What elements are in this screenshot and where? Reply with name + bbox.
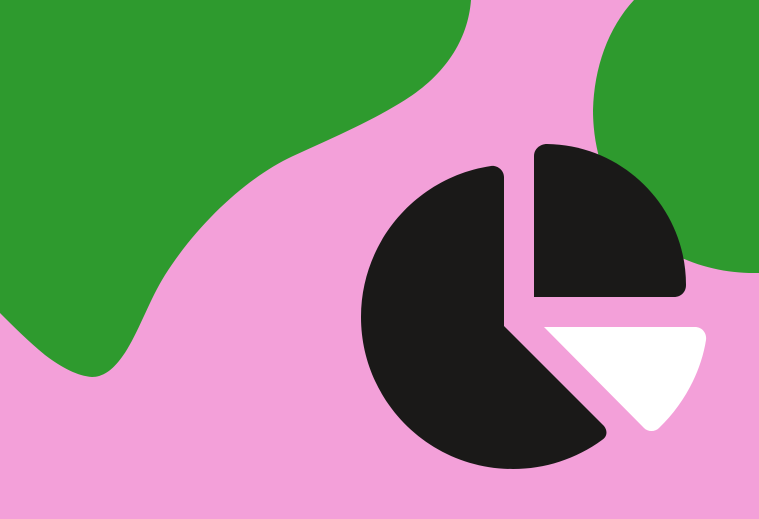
pie slice: large black	[361, 166, 606, 469]
pie slice: top right black	[534, 144, 686, 297]
green blob: top left	[0, 0, 471, 377]
pie slice: white	[544, 327, 706, 431]
green blob: top right	[593, 0, 759, 273]
pie chart icon	[361, 144, 706, 469]
